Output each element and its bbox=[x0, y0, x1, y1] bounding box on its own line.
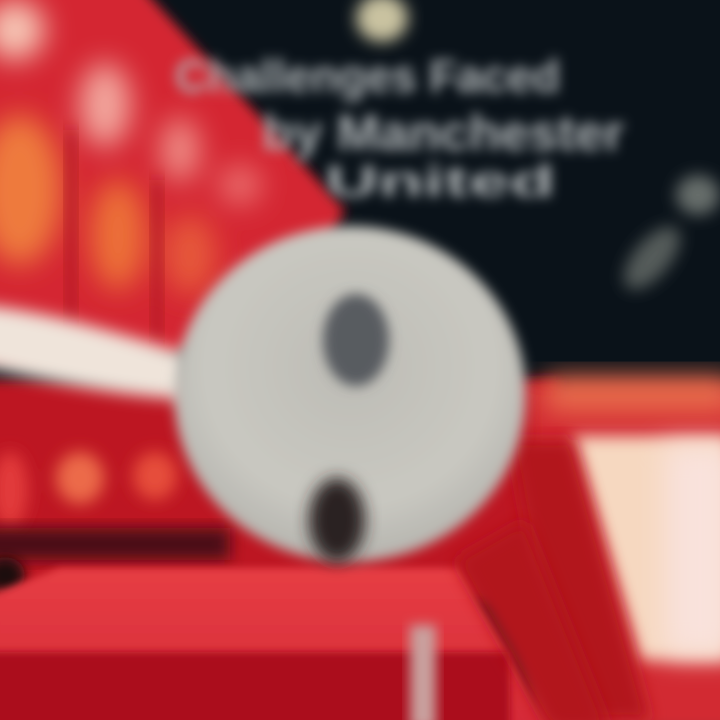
panel: lower red base behind ball bbox=[0, 380, 560, 600]
strap bbox=[410, 625, 436, 720]
ball top patch bbox=[323, 294, 389, 386]
panel: lower seats bbox=[0, 452, 230, 593]
headline text bbox=[175, 50, 624, 206]
panel: red box bbox=[0, 520, 610, 720]
icon: top light bbox=[356, 0, 408, 42]
panel: red stands bbox=[0, 0, 345, 360]
stand highlights bbox=[0, 0, 262, 295]
icon: ball bbox=[174, 226, 526, 562]
headline text: United bbox=[325, 157, 555, 206]
panel: white band bbox=[0, 305, 190, 400]
ball bottom patch bbox=[309, 478, 365, 562]
headline text: Challenges Faced bbox=[175, 50, 560, 102]
panel: right floor bbox=[510, 376, 720, 720]
headline text: by Manchester bbox=[262, 105, 624, 161]
icon: streak marks bbox=[614, 175, 720, 299]
cream panel bbox=[572, 436, 720, 660]
